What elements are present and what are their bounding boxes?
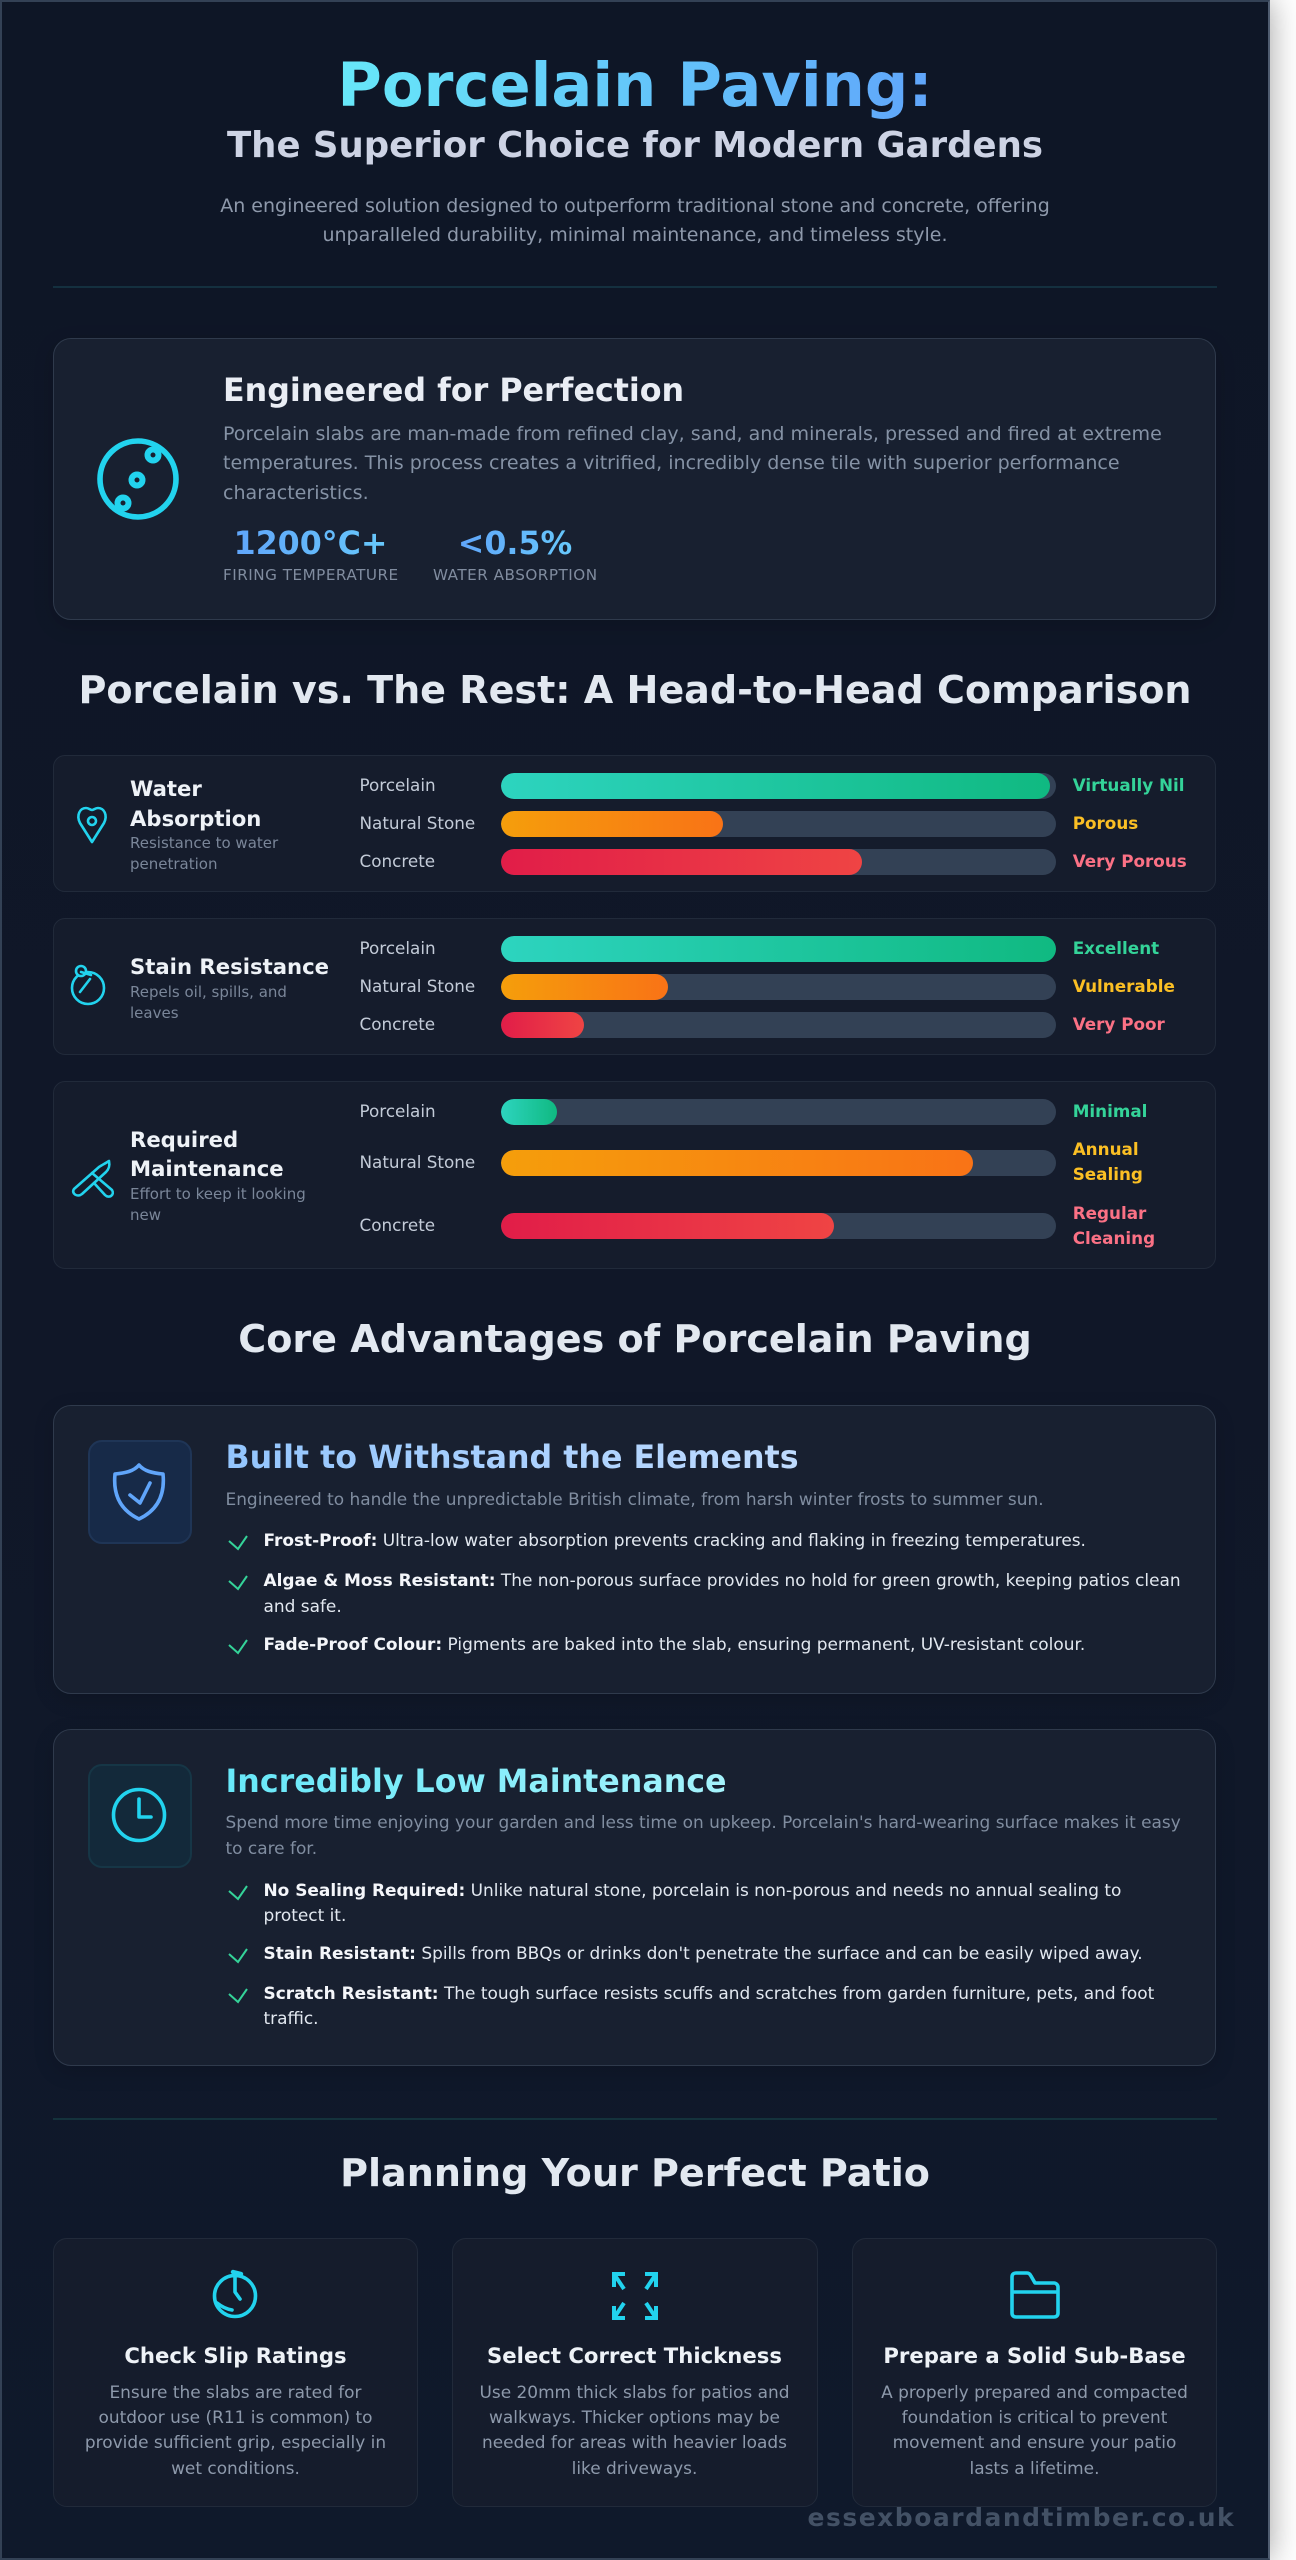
stat: firing temperature: 1200°C+	[234, 526, 387, 562]
label: Natural Stone	[360, 976, 475, 996]
list item: Scratch Resistant: The tough surface resists scuffs and scratches from garden furniture, pets, and foot	[264, 1982, 1154, 2002]
value: Very Poor	[1073, 1014, 1165, 1034]
body text: temperatures. This process creates a vitrified, incredibly dense tile with superior performance	[223, 452, 1120, 474]
bar: concrete	[501, 1012, 1056, 1038]
description: new	[130, 1206, 161, 1224]
list item: Algae & Moss Resistant: The non-porous surface provides no hold for green growth, keeping patios clean	[264, 1570, 1181, 1590]
text: wet conditions.	[171, 2458, 300, 2478]
icon: tools	[72, 1160, 114, 1198]
body text: Porcelain slabs are man-made from refined clay, sand, and minerals, pressed and fired at extreme	[223, 422, 1162, 444]
text: provide sufficient grip, especially in	[85, 2432, 386, 2452]
panel: built to withstand	[53, 1405, 1216, 1694]
description	[226, 1812, 1181, 1858]
value: Sealing	[1073, 1164, 1143, 1184]
icon: folder	[1010, 2271, 1060, 2319]
value: Very Porous	[1073, 851, 1187, 871]
panel: engineered for perfection	[53, 338, 1216, 620]
description	[130, 834, 278, 873]
description: Engineered to handle the unpredictable British climate, from harsh winter frosts to summer sun.	[226, 1488, 1044, 1508]
value: Porous	[1073, 813, 1138, 833]
icon: expand arrows	[612, 2272, 658, 2320]
panel: select correct thickness	[452, 2238, 818, 2507]
stat: water absorption: <0.5%	[458, 526, 572, 562]
description: leaves	[130, 1004, 179, 1022]
label: Porcelain	[360, 938, 436, 958]
heading: planning: Planning Your Perfect Patio	[340, 2151, 930, 2195]
value: Vulnerable	[1073, 976, 1175, 996]
list item: Stain Resistant: Spills from BBQs or drinks don't penetrate the surface and can be easily wiped away.	[264, 1942, 1143, 1962]
description: to care for.	[226, 1838, 317, 1858]
label: Natural Stone	[360, 813, 475, 833]
value: Virtually Nil	[1073, 775, 1185, 795]
text: outdoor use (R11 is common) to	[99, 2407, 372, 2427]
description: penetration	[130, 855, 217, 873]
panel: prepare sub-base	[852, 2238, 1217, 2507]
description: Resistance to water	[130, 834, 278, 852]
title: Water	[130, 776, 202, 801]
description: Repels oil, spills, and	[130, 983, 287, 1001]
list item	[228, 1880, 1121, 1925]
list item: traffic.	[264, 2008, 319, 2028]
label: Natural Stone	[360, 1152, 475, 1172]
text: movement and ensure your patio	[893, 2432, 1176, 2452]
description: Spend more time enjoying your garden and less time on upkeep. Porcelain's hard-wearing surface makes it easy	[226, 1812, 1181, 1832]
description	[130, 983, 287, 1022]
value	[1072, 1138, 1143, 1184]
list item: Frost-Proof: Ultra-low water absorption prevents cracking and flaking in freezing temperatures.	[264, 1530, 1086, 1550]
list item: Fade-Proof Colour: Pigments are baked into the slab, ensuring permanent, UV-resistant colour.	[264, 1634, 1085, 1654]
title: Absorption	[130, 806, 261, 831]
panel: low maintenance	[53, 1729, 1216, 2066]
list item	[228, 1570, 1181, 1616]
icon: stopwatch	[212, 2270, 258, 2318]
subtitle: The Superior Choice for Modern Gardens	[227, 125, 1043, 166]
stat: water absorption: WATER ABSORPTION	[433, 566, 598, 584]
description	[130, 1184, 306, 1224]
watermark: essexboardandtimber.co.uk	[808, 2503, 1235, 2532]
text: walkways. Thicker options may be	[489, 2407, 780, 2427]
icon: shield	[88, 1440, 192, 1544]
body text: characteristics.	[223, 482, 369, 504]
title	[130, 1126, 284, 1181]
value	[1073, 1202, 1155, 1248]
icon: clock	[88, 1764, 192, 1868]
bar: porcelain	[501, 773, 1056, 799]
label: Porcelain	[360, 775, 436, 795]
text: Use 20mm thick slabs for patios and	[479, 2382, 790, 2402]
label: Concrete	[360, 1215, 435, 1235]
list item	[228, 1982, 1154, 2028]
text: A properly prepared and compacted	[881, 2382, 1188, 2402]
text	[85, 2382, 386, 2478]
list item: protect it.	[264, 1905, 346, 1925]
icon: water drop	[77, 806, 107, 844]
panel: water absorption	[53, 755, 1216, 892]
title	[130, 776, 261, 831]
heading: comparison: Porcelain vs. The Rest: A Head-to-Head Comparison	[78, 668, 1192, 712]
text: needed for areas with heavier loads	[482, 2432, 787, 2452]
description: Effort to keep it looking	[130, 1184, 306, 1202]
value: Annual	[1073, 1138, 1139, 1158]
bar: porcelain	[501, 936, 1056, 962]
text: lasts a lifetime.	[970, 2458, 1099, 2478]
intro text: An engineered solution designed to outperform traditional stone and concrete, offering	[220, 195, 1050, 217]
title: Required	[130, 1126, 238, 1152]
bar: natural stone	[501, 1150, 1056, 1176]
panel: stain resistance	[53, 918, 1216, 1055]
title: Select Correct Thickness	[487, 2343, 782, 2368]
intro text: unparalleled durability, minimal maintenance, and timeless style.	[322, 224, 948, 246]
text: like driveways.	[572, 2458, 697, 2478]
text	[881, 2382, 1188, 2478]
bar: concrete	[501, 849, 1056, 875]
heading: Built to Withstand the Elements	[226, 1440, 799, 1476]
heading: Engineered for Perfection	[223, 373, 684, 409]
title: Prepare a Solid Sub-Base	[883, 2343, 1186, 2368]
title: Stain Resistance	[130, 954, 329, 978]
list item: No Sealing Required: Unlike natural stone, porcelain is non-porous and needs no annual sealing to	[264, 1880, 1121, 1900]
heading: Incredibly Low Maintenance	[226, 1764, 727, 1800]
icon: stain	[70, 964, 106, 1006]
label: Concrete	[360, 851, 435, 871]
panel: required maintenance	[53, 1081, 1216, 1269]
stat: firing temperature: FIRING TEMPERATURE	[223, 566, 399, 584]
bar: porcelain	[501, 1099, 1056, 1125]
label: Porcelain	[360, 1101, 436, 1121]
panel: check slip ratings	[53, 2238, 418, 2507]
value: Excellent	[1073, 938, 1159, 958]
title: Porcelain Paving:	[337, 51, 933, 121]
value: Minimal	[1073, 1101, 1147, 1121]
stat: firing temperature	[223, 526, 399, 584]
text: foundation is critical to prevent	[902, 2407, 1167, 2427]
bar: natural stone	[501, 974, 1056, 1000]
title: Maintenance	[130, 1156, 284, 1181]
body text	[223, 422, 1162, 504]
title: Check Slip Ratings	[124, 2343, 347, 2368]
stat: water absorption	[433, 526, 598, 584]
icon: slab with dots	[97, 438, 179, 520]
bar: concrete	[501, 1213, 1056, 1239]
value: Regular	[1073, 1202, 1146, 1222]
label: Concrete	[360, 1014, 435, 1034]
list item: and safe.	[264, 1596, 342, 1616]
heading: core advantages: Core Advantages of Porcelain Paving	[238, 1317, 1032, 1361]
text	[479, 2382, 790, 2478]
bar: natural stone	[501, 811, 1056, 837]
intro text	[220, 195, 1050, 246]
value: Cleaning	[1073, 1228, 1155, 1248]
text: Ensure the slabs are rated for	[109, 2382, 362, 2402]
